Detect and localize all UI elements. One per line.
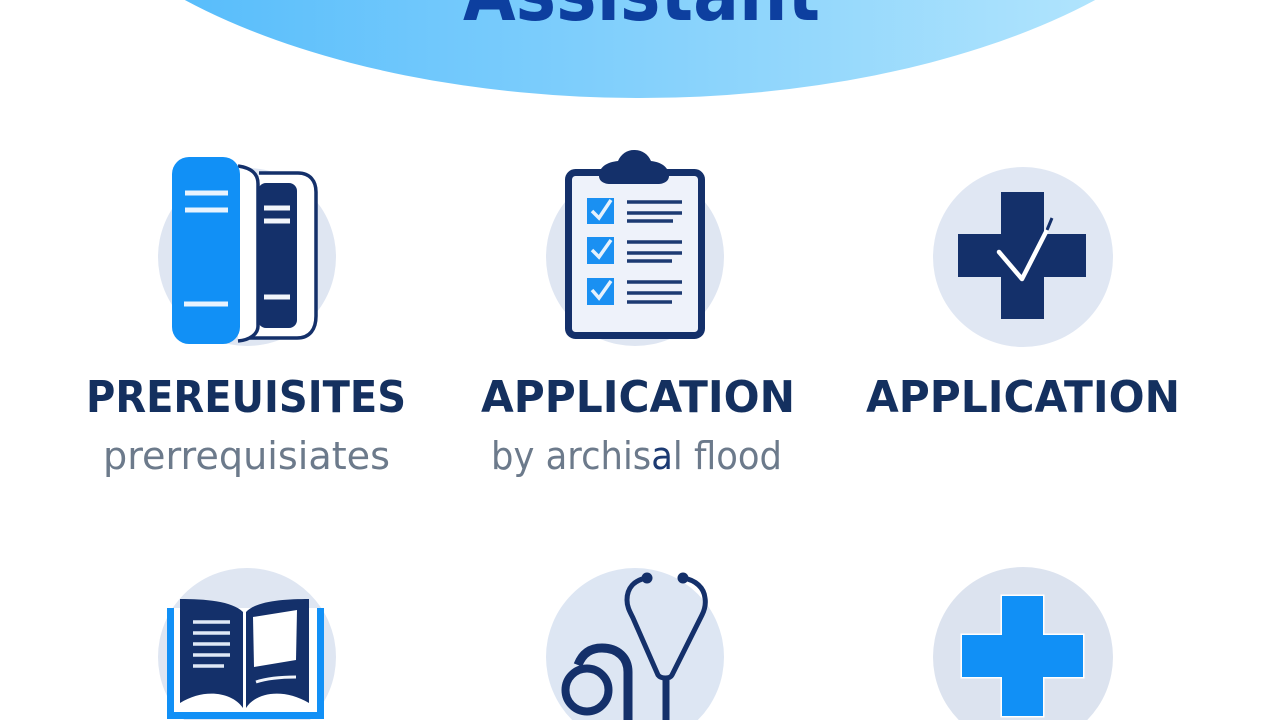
panel: application cross bbox=[866, 167, 1180, 423]
panel: application checklist bbox=[481, 150, 795, 478]
icon: cross with check bbox=[933, 167, 1113, 347]
icon: stethoscope bbox=[546, 568, 724, 720]
icon: clipboard bbox=[546, 150, 724, 346]
icon: books bbox=[158, 157, 336, 346]
subtitle: by archisal flood bbox=[491, 434, 782, 478]
icon: open book bbox=[158, 568, 336, 720]
heading: APPLICATION bbox=[866, 372, 1180, 423]
subtitle: prerrequisiates bbox=[103, 434, 390, 478]
heading: PREREUISITES bbox=[86, 372, 406, 423]
heading: APPLICATION bbox=[481, 372, 795, 423]
panel: prerequisites bbox=[86, 157, 406, 478]
icon: blue cross bbox=[933, 567, 1113, 720]
